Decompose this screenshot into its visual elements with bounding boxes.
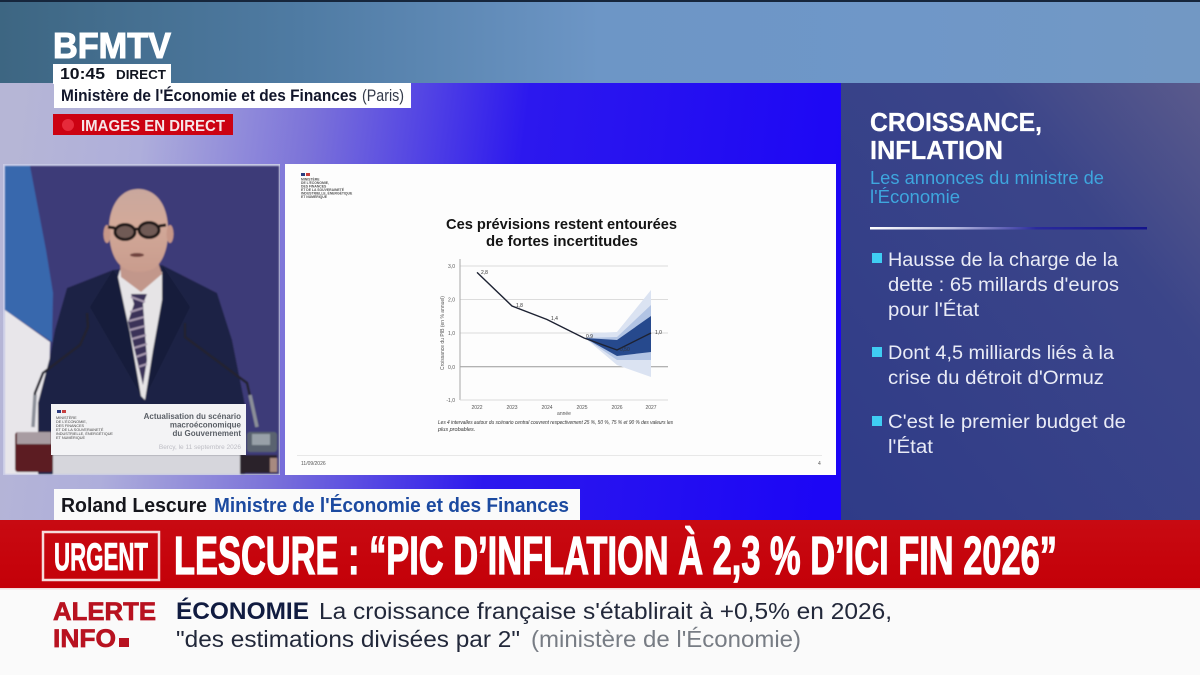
neck	[120, 262, 162, 292]
bullet: détroit d'Ormuz: crise du détroit d'Ormuz	[888, 368, 1104, 389]
data labels: 1,0	[655, 330, 662, 336]
data labels: 1,4	[551, 316, 558, 322]
alerte info label	[53, 598, 156, 653]
bullet: charge de la dette: pour l'État	[888, 300, 980, 321]
time and direct tag	[53, 64, 171, 84]
slide logo	[301, 173, 353, 199]
bullet: charge de la dette: Hausse de la charge de la	[888, 250, 1118, 271]
lectern sign: ET NUMÉRIQUE	[56, 435, 86, 440]
lectern sign: ET DE LA SOUVERAINETÉ	[56, 427, 104, 432]
slide logo: INDUSTRIELLE, ÉNERGÉTIQUE	[301, 190, 353, 196]
right lapel	[147, 265, 190, 393]
axis labels: 2022	[471, 405, 483, 411]
location strap: Ministère de l'Économie et des Finances	[61, 86, 357, 105]
lectern sign: macroéconomique	[170, 420, 242, 430]
banner: urgent headline	[0, 520, 1200, 588]
panel: right side announcements	[841, 83, 1200, 520]
bullet: détroit d'Ormuz: Dont 4,5 milliards liés à la	[888, 343, 1114, 364]
lectern sign: DES FINANCES	[56, 424, 85, 428]
slide footer: 4	[818, 461, 821, 467]
axis labels: 2025	[576, 405, 588, 411]
axis labels	[440, 264, 657, 417]
chart: GDP growth fan chart	[440, 259, 668, 417]
lectern sign: Actualisation du scénario	[144, 412, 241, 421]
axis labels: Croissance du PIB (en % annuel)	[440, 296, 446, 370]
head	[109, 189, 168, 272]
lectern sign: du Gouvernement	[173, 429, 241, 438]
data labels	[481, 270, 662, 353]
panel: presentation slide	[285, 164, 836, 475]
speaker name strap: Ministre de l'Économie et des Finances	[214, 494, 569, 517]
slide title: de fortes incertitudes	[486, 233, 638, 250]
data labels: 0,9	[586, 334, 593, 340]
chart caption: Les 4 intervalles autour du scénario central couvrent respectivement 25 %, 50 %, 75 % et 90 % des valeurs les	[438, 420, 673, 426]
data labels: 1,8	[516, 303, 523, 309]
ticker text line 1	[176, 597, 892, 625]
lectern base	[53, 455, 240, 474]
central scenario line	[477, 272, 651, 350]
lectern sign: INDUSTRIELLE, ÉNERGÉTIQUE	[56, 431, 113, 436]
ticker text line 2: (ministère de l'Économie)	[531, 626, 801, 652]
axis labels: 2027	[645, 405, 657, 411]
time and direct tag: 10:45	[60, 66, 105, 83]
live images tag	[53, 114, 233, 135]
axis labels: année	[557, 411, 571, 417]
suit	[38, 265, 245, 474]
data labels: 0,50	[620, 347, 630, 353]
subheading: l'Économie	[870, 187, 960, 207]
grid lines	[460, 266, 668, 333]
bullet: premier budget: C'est le premier budget de	[888, 412, 1126, 433]
bullet: premier budget: l'État	[888, 437, 934, 458]
ticker text line 1: La croissance française s'établirait à +0,5% en 2026,	[319, 598, 892, 624]
axis labels: 0,0	[448, 365, 455, 371]
subheading	[870, 168, 1104, 207]
icon: French flag	[5, 166, 53, 474]
slide title	[446, 216, 677, 250]
heading: croissance, inflation: CROISSANCE,	[870, 107, 1042, 137]
alerte info label: INFO	[53, 625, 116, 653]
forecast fan	[585, 290, 651, 377]
slide logo: ET NUMÉRIQUE	[301, 194, 328, 199]
chart caption: plus probables.	[437, 427, 475, 433]
axis labels: 2,0	[448, 298, 455, 304]
photo: minister at lectern	[3, 164, 280, 475]
subheading: Les annonces du ministre de	[870, 168, 1104, 188]
slide logo: DES FINANCES	[301, 184, 327, 188]
slide title: Ces prévisions restent entourées	[446, 216, 677, 233]
axis labels: -1,0	[446, 398, 455, 404]
urgent badge: URGENT	[54, 536, 148, 579]
axis labels: 1,0	[448, 331, 455, 337]
chart caption	[437, 420, 673, 433]
microphones	[33, 313, 88, 427]
axis labels: 2023	[506, 405, 518, 411]
panel: news ticker	[0, 588, 1200, 675]
left lapel	[90, 270, 142, 397]
mouth	[130, 253, 144, 257]
alerte info label: ALERTE	[53, 598, 156, 626]
bullet: charge de la dette	[872, 250, 1119, 321]
glasses	[108, 222, 166, 240]
tie	[128, 294, 147, 385]
slide footer	[301, 461, 821, 467]
slide logo: MINISTÈRE	[301, 176, 320, 182]
speaker name strap	[54, 489, 580, 520]
lectern sign: Bercy, le 11 septembre 2026	[159, 444, 241, 451]
bullet: charge de la dette: dette : 65 millards d'euros	[888, 275, 1119, 296]
speaker name strap: Roland Lescure	[61, 494, 207, 517]
urgent badge	[43, 532, 159, 580]
data labels: 2,8	[481, 270, 488, 276]
lectern sign: DE L'ÉCONOMIE,	[56, 419, 87, 424]
axis labels: 2024	[541, 405, 553, 411]
ticker text line 2	[176, 626, 801, 652]
glasses of water	[15, 432, 53, 472]
lectern sign: MINISTÈRE	[56, 415, 77, 420]
lectern sign	[51, 404, 246, 455]
slide logo: DE L'ÉCONOMIE,	[301, 180, 329, 185]
time and direct tag: DIRECT	[116, 67, 166, 82]
axis labels: 3,0	[448, 264, 455, 270]
location strap	[54, 83, 411, 108]
live images tag: IMAGES EN DIRECT	[81, 118, 225, 135]
axis labels: 2026	[611, 405, 623, 411]
slide footer: 11/09/2026	[301, 461, 326, 467]
ticker text line 2: "des estimations divisées par 2"	[176, 626, 520, 652]
location strap: (Paris)	[362, 86, 404, 105]
heading: croissance, inflation	[870, 107, 1042, 165]
slide logo: ET DE LA SOUVERAINETÉ	[301, 187, 345, 192]
bullet: détroit d'Ormuz	[872, 343, 1114, 389]
heading: croissance, inflation: INFLATION	[870, 135, 1003, 165]
shirt	[118, 270, 162, 400]
ticker text line 1: ÉCONOMIE	[176, 597, 309, 625]
bullet: premier budget	[872, 412, 1126, 458]
logo: BFMTV: BFMTV	[53, 25, 171, 66]
